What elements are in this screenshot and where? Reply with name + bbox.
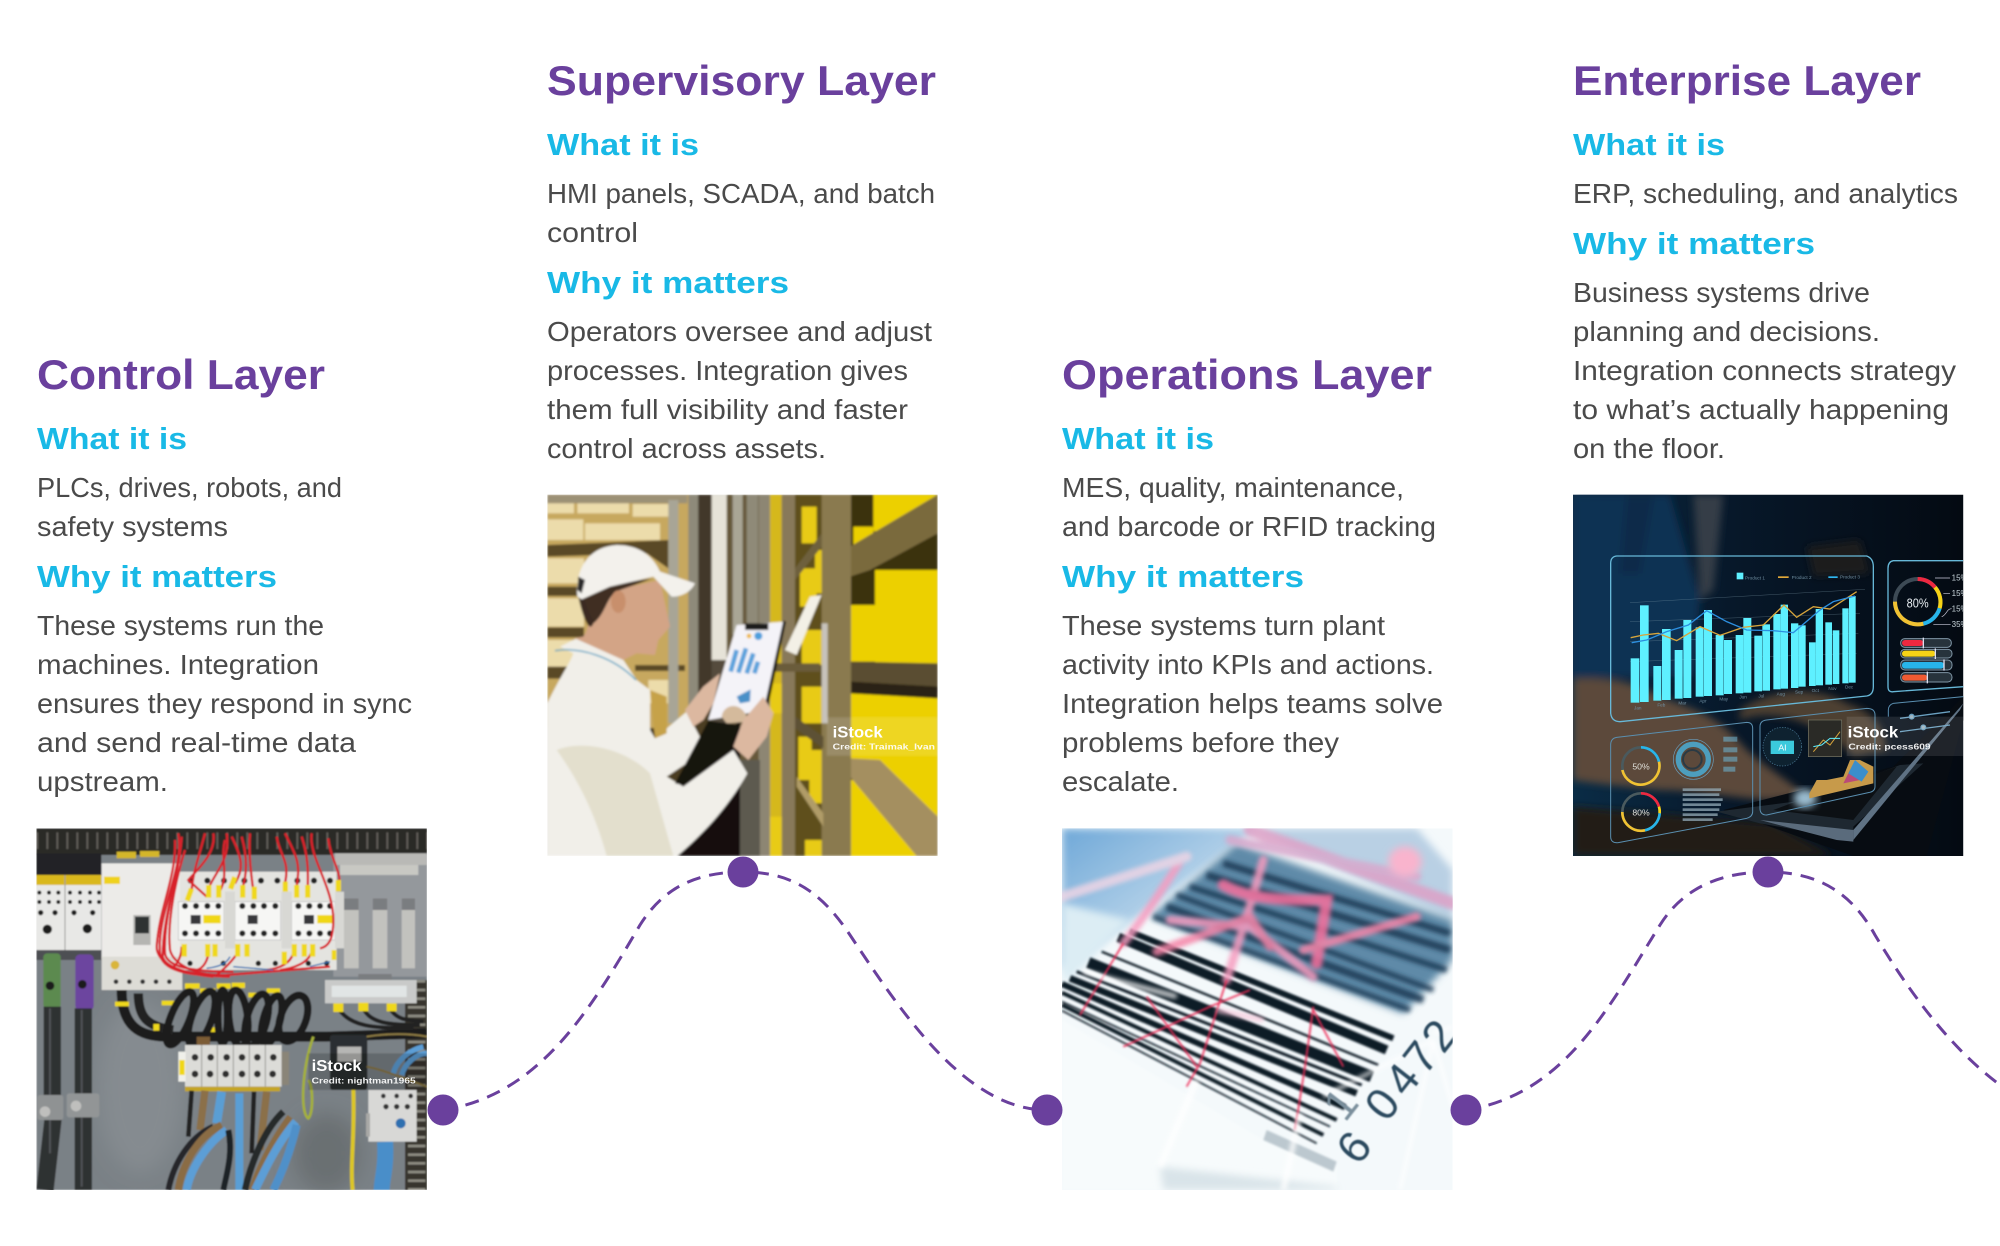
marker: node 2 — [728, 856, 758, 888]
text block: what it is — [1062, 472, 1436, 542]
text block: why it matters: control across assets. — [547, 433, 826, 464]
barcode digits: 7 — [1393, 1032, 1448, 1083]
gauge bars — [1901, 639, 1952, 682]
chart legend and axis labels: May — [1719, 697, 1729, 702]
chart legend and axis labels: Jan — [1634, 705, 1642, 710]
image: analytics dashboard over laptop: 15% — [1952, 589, 1968, 598]
panel: operations layer — [1062, 351, 1467, 1190]
image: analytics dashboard over laptop: 15% — [1952, 604, 1968, 613]
marker: node 4 — [1450, 1094, 1482, 1126]
watermark: iStock credit — [833, 726, 934, 750]
text block: what it is: HMI panels, SCADA, and batch — [547, 178, 935, 209]
text block: what it is: control — [547, 217, 638, 248]
chart legend and axis labels — [1634, 575, 1860, 710]
barcode digits: 0 — [1354, 1078, 1410, 1129]
image: barcode close-up — [1062, 828, 1467, 1190]
panel: supervisory layer — [547, 57, 938, 856]
panel: enterprise layer — [1573, 57, 1968, 856]
chart legend and axis labels: Feb — [1657, 703, 1666, 708]
chart legend and axis labels: Nov — [1828, 686, 1837, 691]
marker: node 1 — [428, 1094, 458, 1126]
gauge: 80 percent small — [1622, 793, 1660, 831]
gauge: 80 percent — [1895, 578, 1952, 624]
text block: why it matters: problems before they — [1062, 727, 1339, 758]
chart legend and axis labels: Aug — [1777, 691, 1785, 696]
panel: control layer — [36, 351, 427, 1193]
subheading: what it is: What it is — [547, 127, 699, 162]
chart legend and axis labels: Dec — [1845, 685, 1854, 690]
subheading: what it is: What it is — [1573, 127, 1725, 162]
chart legend and axis labels: Product 1 — [1745, 575, 1765, 580]
text block: what it is: safety systems — [37, 511, 228, 542]
text block: why it matters: These systems turn plant — [1062, 610, 1385, 641]
subheading: what it is: What it is — [1062, 421, 1214, 456]
subheading: why it matters: Why it matters — [37, 559, 277, 594]
text block: what it is — [547, 178, 935, 248]
heading: supervisory layer: Supervisory Layer — [547, 57, 936, 104]
text block: why it matters: machines. Integration — [37, 649, 319, 680]
watermark: iStock credit: iStock — [833, 724, 883, 741]
text block: why it matters — [1573, 277, 1956, 464]
gauge: 50 percent: 50% — [1632, 761, 1650, 771]
text block: why it matters: to what’s actually happening — [1573, 394, 1949, 425]
chart legend and axis labels: Oct — [1812, 688, 1820, 693]
text block: why it matters: Operators oversee and adjust — [547, 316, 932, 347]
text block: why it matters: ensures they respond in sync — [37, 688, 412, 719]
text block: what it is — [37, 472, 342, 542]
text block: why it matters: on the floor. — [1573, 433, 1725, 464]
text block: why it matters — [37, 610, 412, 797]
image: analytics dashboard over laptop — [1573, 495, 1968, 856]
radial dial — [1673, 739, 1713, 779]
heading: enterprise layer: Enterprise Layer — [1573, 57, 1921, 104]
barcode digits — [1326, 1020, 1453, 1162]
watermark: iStock credit — [1848, 724, 1931, 751]
image: worker with clipboard in cheese warehouse — [547, 495, 938, 856]
barcode digits: 4 — [1374, 1053, 1430, 1104]
text block: why it matters — [1062, 610, 1443, 797]
text block: why it matters: Integration connects strategy — [1573, 355, 1956, 386]
gauge: 80 percent small: 80% — [1632, 807, 1650, 817]
image: electrical control panel — [36, 828, 427, 1193]
text block: why it matters: planning and decisions. — [1573, 316, 1880, 347]
text block: why it matters: escalate. — [1062, 766, 1179, 797]
watermark: iStock credit: iStock — [1848, 724, 1898, 741]
text block: why it matters: and send real-time data — [37, 727, 357, 758]
watermark: iStock credit: Credit: pcess609 — [1848, 742, 1931, 751]
watermark: iStock credit: iStock — [312, 1058, 362, 1075]
text block: why it matters: Business systems drive — [1573, 277, 1870, 308]
text block: why it matters: These systems run the — [37, 610, 324, 641]
chart legend and axis labels: Sep — [1795, 689, 1804, 694]
dial sliders — [1900, 712, 1950, 732]
chart legend and axis labels: Jul — [1758, 693, 1764, 698]
text block: what it is: PLCs, drives, robots, and — [37, 472, 342, 503]
chart legend and axis labels: Product 2 — [1792, 575, 1812, 580]
text block: what it is: MES, quality, maintenance, — [1062, 472, 1404, 503]
watermark: iStock credit — [312, 1058, 416, 1085]
chart legend and axis labels: Mar — [1678, 701, 1687, 706]
chart legend and axis labels: Product 3 — [1840, 575, 1860, 580]
barcode digits: 6 — [1326, 1122, 1382, 1173]
marker: node 3 — [1032, 1094, 1062, 1126]
watermark: iStock credit: Credit: nightman1965 — [312, 1076, 416, 1085]
watermark: iStock credit: Credit: Traimak_Ivan — [833, 742, 935, 751]
chart legend and axis labels: Apr — [1699, 699, 1707, 704]
text block: why it matters — [547, 316, 932, 464]
text block: what it is: and barcode or RFID tracking — [1062, 511, 1436, 542]
image: analytics dashboard over laptop: 15% — [1952, 574, 1968, 583]
connector: dashed path — [443, 872, 2000, 1110]
mini charts — [1808, 720, 1873, 798]
text block: why it matters: upstream. — [37, 766, 168, 797]
gauge: 80 percent: 80% — [1907, 595, 1929, 610]
text block: why it matters: Integration helps teams solve — [1062, 688, 1443, 719]
subheading: why it matters: Why it matters — [547, 265, 789, 300]
gauge: 50 percent — [1622, 747, 1660, 785]
marker: node 5 — [1752, 856, 1784, 888]
image: analytics dashboard over laptop: 35% — [1952, 620, 1968, 629]
subheading: why it matters: Why it matters — [1573, 226, 1815, 261]
text block: why it matters: them full visibility and faster — [547, 394, 908, 425]
heading: control layer: Control Layer — [37, 351, 325, 398]
heading: operations layer: Operations Layer — [1062, 351, 1432, 398]
barcode digits: 2 — [1411, 1010, 1467, 1061]
text block: why it matters: activity into KPIs and actions. — [1062, 649, 1434, 680]
subheading: what it is: What it is — [37, 421, 187, 456]
subheading: why it matters: Why it matters — [1062, 559, 1304, 594]
AI badge — [1763, 727, 1802, 766]
AI badge: AI — [1778, 743, 1787, 753]
bar chart — [1631, 596, 1856, 703]
barcode digits: 1 — [1313, 1078, 1368, 1129]
text block: what it is: ERP, scheduling, and analytics — [1573, 178, 1958, 209]
text block: why it matters: processes. Integration gives — [547, 355, 908, 386]
chart legend and axis labels: Jun — [1739, 695, 1747, 700]
